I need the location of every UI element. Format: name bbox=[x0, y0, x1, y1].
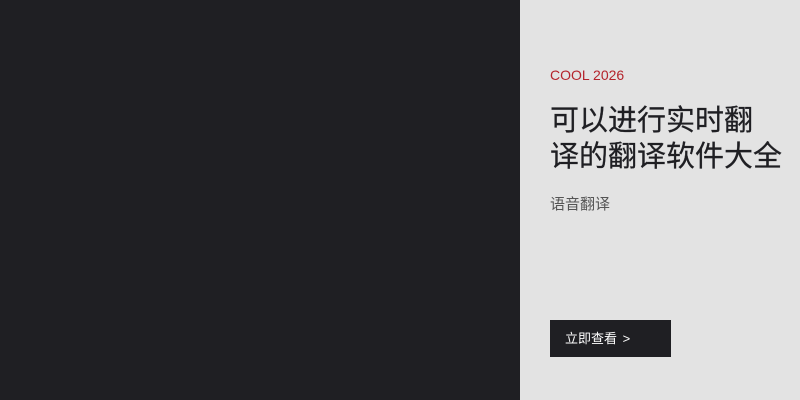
panel: text sidebar bbox=[520, 0, 800, 400]
button label: 立即查看 > bbox=[565, 331, 630, 346]
panel: dark image area bbox=[0, 0, 520, 400]
button bbox=[550, 320, 671, 357]
eyebrow label: COOL 2026 bbox=[550, 67, 624, 83]
title: 可以进行实时翻 bbox=[550, 105, 753, 137]
subtitle: 语音翻译 bbox=[550, 196, 610, 213]
title bbox=[550, 105, 782, 173]
title: 译的翻译软件大全 bbox=[550, 141, 782, 173]
